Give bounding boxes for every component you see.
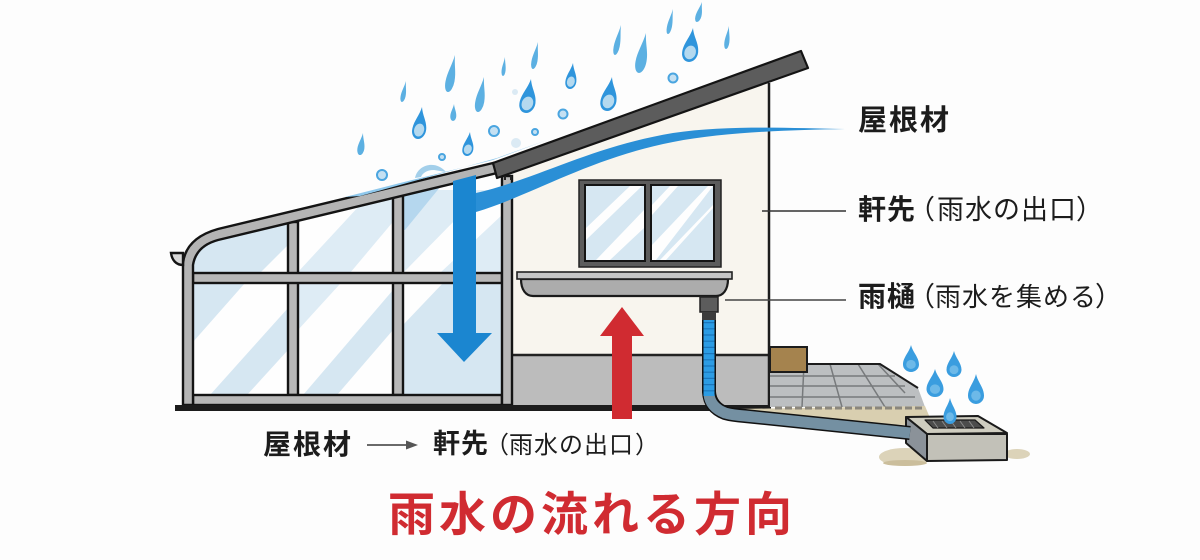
- label: eaves: （: [908, 195, 935, 225]
- label: gutter: 雨樋: [858, 281, 916, 312]
- gutter: [517, 272, 732, 296]
- downspout: [700, 297, 910, 433]
- water spray on sloped roof: [345, 89, 547, 197]
- flow label: roofing material to eaves: 軒先: [433, 429, 489, 459]
- label: eaves: 雨水の出口: [937, 195, 1077, 225]
- label: eaves: 軒先: [858, 194, 916, 225]
- label: gutter: 雨水を集める: [935, 282, 1097, 312]
- red arrow: gutter direction: [600, 307, 644, 419]
- label: gutter: （: [908, 282, 935, 312]
- dark roof panel: roofing material: [493, 51, 808, 178]
- paving and soil: [735, 364, 1030, 466]
- flow label: roofing material to eaves: 雨水の出口: [509, 432, 634, 459]
- label: eaves: ）: [1076, 195, 1103, 225]
- house wall: [512, 83, 769, 406]
- window: [579, 180, 721, 267]
- flow label: roofing material to eaves: （: [485, 432, 509, 459]
- flow label: roofing material to eaves: ）: [635, 432, 659, 459]
- flow label: roofing material to eaves: [263, 429, 659, 460]
- infographic: rainwater flow on a house with sunroom: [170, 2, 1104, 536]
- leader line: gutter: [725, 299, 846, 301]
- blue arrow: water running along the roof to the eaves: [476, 128, 845, 212]
- leader line: eaves: [762, 210, 846, 212]
- label: roofing material: 屋根材: [858, 104, 951, 137]
- catch basin: [906, 416, 1007, 461]
- rain drops: [356, 2, 732, 180]
- base line of building: [175, 405, 771, 411]
- flow label: roofing material to eaves: 屋根材: [263, 429, 353, 460]
- water drops above catch basin: [903, 345, 984, 424]
- title: 雨水の流れる方向: [388, 488, 796, 541]
- blue arrow: water falling down: [437, 175, 492, 362]
- label: gutter: ）: [1095, 282, 1122, 312]
- sunroom frame: [171, 163, 512, 405]
- glass panels of sunroom: [194, 188, 501, 394]
- brown box at wall base: [770, 347, 807, 372]
